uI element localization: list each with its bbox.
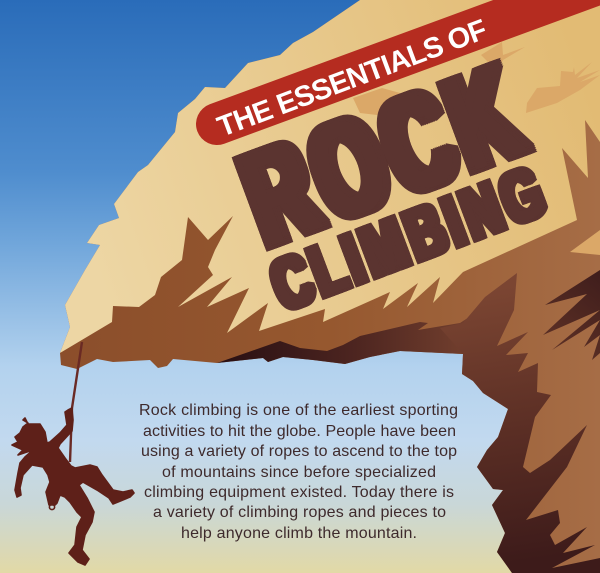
intro paragraph: activities to hit the globe. People have been bbox=[143, 423, 456, 440]
rock underside shadow bbox=[217, 310, 490, 364]
banner text: THE ESSENTIALS OF bbox=[213, 14, 491, 144]
carabiner bbox=[49, 504, 55, 510]
intro paragraph: using a variety of ropes to ascend to the top bbox=[141, 443, 457, 460]
intro paragraph: a variety of climbing ropes and pieces to bbox=[153, 504, 446, 521]
intro paragraph: help anyone climb the mountain. bbox=[181, 525, 417, 542]
rock texture patches bbox=[353, 42, 600, 255]
title banner bbox=[213, 0, 600, 144]
title word: CLIMBING: CLIMBING bbox=[261, 150, 559, 327]
cliff face shadow bbox=[440, 273, 600, 573]
intro paragraph: climbing equipment existed. Today there is bbox=[144, 484, 454, 501]
intro paragraph bbox=[139, 402, 458, 542]
dark rock spikes bbox=[543, 270, 600, 360]
intro paragraph: of mountains since before specialized bbox=[162, 464, 436, 481]
red ribbon bbox=[217, 0, 600, 124]
climbing rope bbox=[70, 342, 82, 462]
climber silhouette bbox=[12, 408, 134, 565]
sunlit rock face bbox=[60, 0, 600, 353]
intro paragraph: Rock climbing is one of the earliest sporting bbox=[139, 402, 458, 419]
title word: ROCK: ROCK bbox=[225, 33, 547, 274]
